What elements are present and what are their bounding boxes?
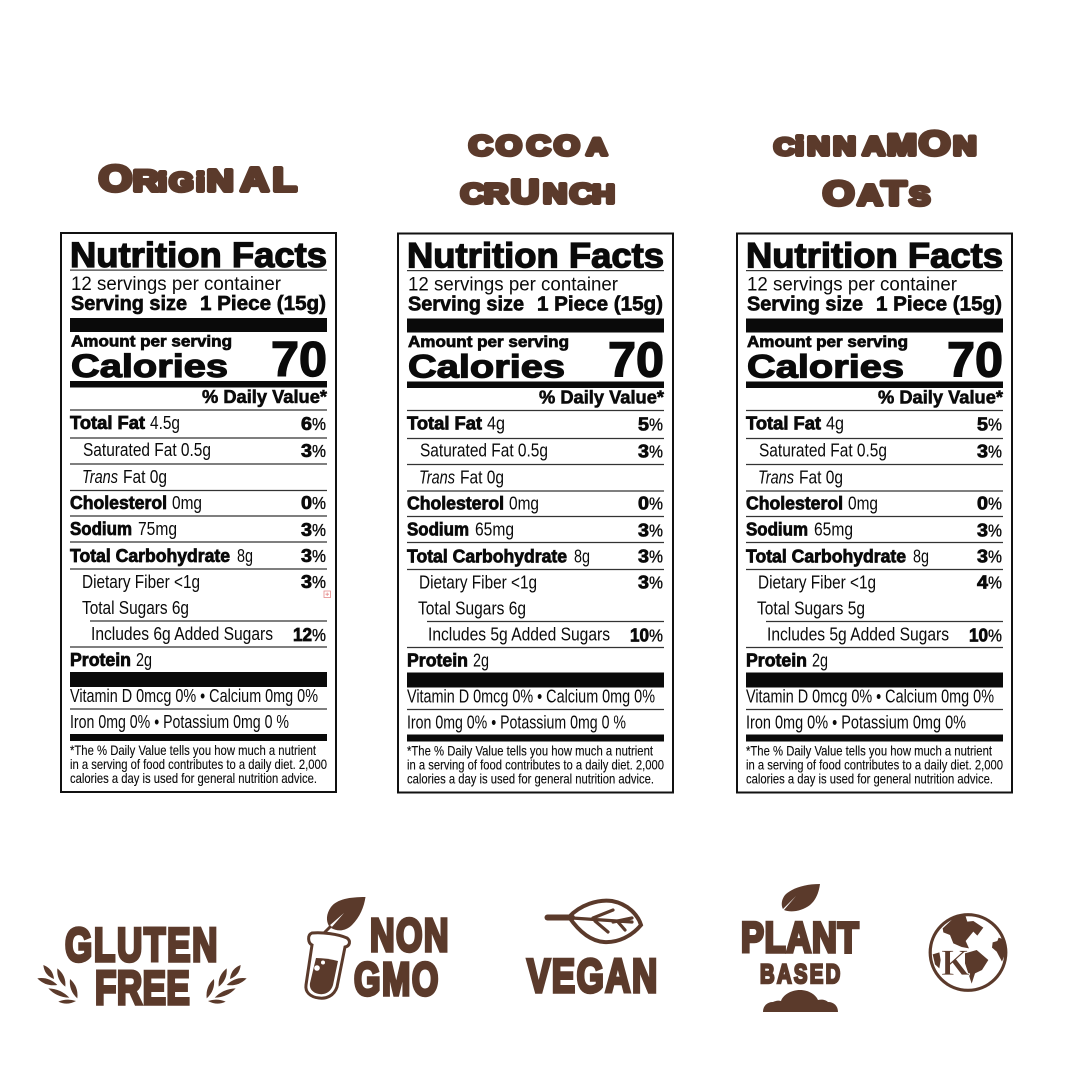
row: total carbohydrate bbox=[407, 546, 663, 566]
vitamins: Iron 0mg 0% • Potassium 0mg 0 % bbox=[407, 712, 626, 732]
row: cholesterol: % bbox=[312, 493, 326, 513]
row: protein: 2g bbox=[812, 650, 828, 670]
servings: Serving size bbox=[71, 293, 187, 315]
heading: Cocoa Crunch: C bbox=[570, 178, 594, 209]
heading: Original: O bbox=[99, 159, 132, 199]
thick bar bbox=[746, 672, 1003, 688]
row: total sugars: Total Sugars 5g bbox=[757, 598, 865, 618]
vitamins: Vitamin D 0mcg 0% • Calcium 0mg 0% bbox=[70, 685, 318, 706]
badge: gluten free bbox=[37, 918, 247, 1014]
badge: vegan: VEGAN bbox=[527, 949, 657, 1002]
calories: 70 bbox=[947, 334, 1003, 388]
heading: Cinnamon Oats bbox=[774, 124, 977, 212]
badge: plant based: BASED bbox=[760, 959, 840, 990]
row: dietary fiber: 3 bbox=[301, 572, 312, 592]
row: total fat: Total Fat bbox=[407, 414, 482, 434]
icon: globe with K: K bbox=[941, 943, 970, 984]
heading: Cocoa Crunch bbox=[461, 131, 615, 210]
row: sodium: 3 bbox=[638, 520, 649, 540]
medium bar bbox=[407, 382, 664, 388]
heading: Cinnamon Oats: i bbox=[795, 132, 804, 161]
servings bbox=[408, 274, 663, 316]
row: cholesterol: 0 bbox=[301, 493, 312, 513]
row: total carbohydrate bbox=[70, 545, 326, 566]
heading: Cocoa Crunch: C bbox=[527, 131, 551, 161]
calories: Calories bbox=[747, 348, 904, 384]
heading: Original bbox=[99, 159, 297, 199]
row: protein: Protein bbox=[407, 650, 468, 670]
badge: plant based bbox=[741, 884, 859, 1012]
heading: Original: R bbox=[133, 165, 159, 198]
row: total carbohydrate: 3 bbox=[977, 546, 988, 566]
thick bar bbox=[746, 318, 1003, 332]
thick bar bbox=[70, 672, 327, 687]
heading: Cinnamon Oats: N bbox=[807, 132, 830, 161]
row: saturated fat bbox=[83, 439, 326, 461]
row: cholesterol: 0mg bbox=[172, 492, 202, 513]
row: total sugars: Total Sugars 6g bbox=[418, 598, 526, 618]
calories bbox=[747, 334, 1003, 388]
calories: Amount per serving bbox=[747, 334, 908, 351]
row: trans fat bbox=[419, 466, 504, 488]
medium bar bbox=[746, 734, 1003, 742]
icon: test tube with leaf bbox=[306, 897, 366, 998]
row: added sugars: 10 bbox=[969, 626, 988, 646]
row: dietary fiber: Dietary Fiber <1g bbox=[758, 572, 876, 592]
calories bbox=[71, 333, 327, 387]
icon: leaf outline bbox=[548, 901, 641, 942]
badge: gluten free: GLUTEN bbox=[65, 918, 217, 971]
row: trans fat: Trans bbox=[82, 466, 118, 487]
calories: Calories bbox=[408, 348, 565, 384]
heading: Cocoa Crunch: C bbox=[461, 178, 485, 209]
row: cholesterol: % bbox=[988, 494, 1002, 514]
badge: vegan bbox=[527, 901, 657, 1002]
heading: Original: N bbox=[207, 164, 234, 198]
footnote: in a serving of food contributes to a daily diet. 2,000 bbox=[407, 756, 664, 772]
daily value header: % Daily Value* bbox=[878, 388, 1003, 408]
vitamins: Vitamin D 0mcg 0% • Calcium 0mg 0% bbox=[407, 686, 655, 706]
row: sodium: % bbox=[649, 520, 663, 540]
row: total carbohydrate: % bbox=[988, 546, 1002, 566]
row: dietary fiber: Dietary Fiber <1g bbox=[82, 571, 200, 592]
heading: Cocoa Crunch: U bbox=[511, 173, 539, 210]
heading: Cocoa Crunch: H bbox=[592, 180, 615, 209]
row: cholesterol: 0mg bbox=[509, 492, 539, 514]
panel: Cocoa Crunch nutrition facts bbox=[398, 234, 673, 792]
vitamins bbox=[70, 685, 318, 732]
servings: 1 Piece (15g) bbox=[537, 294, 663, 316]
row: total fat bbox=[407, 412, 663, 434]
row: dietary fiber bbox=[82, 571, 326, 592]
row: saturated fat bbox=[759, 440, 1002, 462]
row: protein: 2g bbox=[473, 650, 489, 670]
heading: Cinnamon Oats: A bbox=[862, 132, 885, 161]
heading: Cinnamon Oats: N bbox=[833, 132, 856, 161]
row: total fat: Total Fat bbox=[70, 413, 145, 433]
heading: Cocoa Crunch: C bbox=[469, 131, 493, 161]
heading: Cocoa Crunch: O bbox=[496, 131, 522, 161]
row: added sugars: % bbox=[649, 626, 663, 646]
row: protein: 2g bbox=[136, 649, 152, 670]
footnote bbox=[407, 742, 664, 786]
row: total carbohydrate bbox=[746, 546, 1002, 566]
row: sodium: 3 bbox=[977, 520, 988, 540]
row: cholesterol bbox=[746, 492, 1002, 514]
badge: non gmo: NON bbox=[370, 909, 448, 961]
servings: 12 servings per container bbox=[747, 274, 958, 296]
row: added sugars: Includes 6g Added Sugars bbox=[91, 623, 273, 644]
calories: 70 bbox=[271, 333, 327, 387]
panel: Cinnamon Oats nutrition facts bbox=[737, 234, 1012, 792]
row: total fat: 4g bbox=[487, 412, 505, 434]
icon: soil mound bbox=[763, 990, 838, 1012]
row: trans fat bbox=[758, 466, 843, 488]
row: sodium: % bbox=[312, 520, 326, 540]
row: total fat: % bbox=[312, 414, 326, 434]
row: dietary fiber: Dietary Fiber <1g bbox=[419, 572, 537, 592]
row: saturated fat: 3 bbox=[638, 442, 649, 462]
row: total carbohydrate: Total Carbohydrate bbox=[70, 546, 230, 566]
row: added sugars: Includes 5g Added Sugars bbox=[428, 624, 610, 644]
panel: Original nutrition facts bbox=[61, 233, 336, 792]
row: trans fat bbox=[82, 466, 167, 487]
footnote bbox=[746, 742, 1003, 786]
calories: Amount per serving bbox=[408, 334, 569, 351]
row: cholesterol: 0 bbox=[977, 494, 988, 514]
badge: non gmo: GMO bbox=[354, 953, 438, 1005]
row: trans fat: Fat 0g bbox=[799, 466, 843, 488]
icon: leaf bbox=[782, 884, 820, 911]
row: dietary fiber bbox=[419, 572, 663, 592]
row: saturated fat: % bbox=[312, 441, 326, 461]
row: sodium: 65mg bbox=[814, 518, 853, 540]
servings: 1 Piece (15g) bbox=[876, 294, 1002, 316]
row: sodium: 65mg bbox=[475, 518, 514, 540]
heading: Original: A bbox=[240, 161, 269, 198]
footnote: *The % Daily Value tells you how much a nutrient bbox=[407, 742, 653, 758]
vitamins bbox=[746, 686, 994, 732]
heading: Original: G bbox=[169, 168, 193, 197]
row: saturated fat: Saturated Fat 0.5g bbox=[83, 439, 211, 460]
row: trans fat: Trans bbox=[419, 466, 455, 488]
row: protein: Protein bbox=[70, 650, 131, 670]
heading: Cocoa Crunch: O bbox=[554, 131, 580, 161]
row: trans fat: Trans bbox=[758, 466, 794, 488]
heading: Cinnamon Oats: T bbox=[882, 174, 907, 212]
row: sodium bbox=[70, 518, 326, 540]
row: total fat: % bbox=[988, 414, 1002, 434]
medium bar bbox=[70, 734, 327, 741]
heading: Original: i bbox=[158, 168, 167, 197]
row: saturated fat: Saturated Fat 0.5g bbox=[420, 440, 548, 460]
row: dietary fiber: 4 bbox=[977, 572, 988, 592]
row: trans fat: Fat 0g bbox=[460, 466, 504, 488]
title: Nutrition Facts: Nutrition Facts bbox=[407, 236, 664, 276]
row: total carbohydrate: 3 bbox=[301, 546, 312, 566]
row: total fat: 5 bbox=[638, 414, 649, 434]
row: total sugars: Total Sugars 6g bbox=[82, 597, 189, 618]
row: saturated fat: % bbox=[988, 442, 1002, 462]
row: saturated fat: 3 bbox=[977, 442, 988, 462]
row: saturated fat: Saturated Fat 0.5g bbox=[759, 440, 887, 460]
heading: Cinnamon Oats: O bbox=[919, 124, 950, 162]
heading: Original: L bbox=[273, 161, 297, 198]
row: total fat: 6 bbox=[301, 414, 312, 434]
vitamins: Vitamin D 0mcg 0% • Calcium 0mg 0% bbox=[746, 686, 994, 706]
row: total fat bbox=[746, 412, 1002, 434]
icon: left wheat bbox=[37, 965, 78, 1004]
row: cholesterol: 0 bbox=[638, 494, 649, 514]
row: protein: Protein bbox=[746, 650, 807, 670]
row: sodium: Sodium bbox=[407, 520, 469, 540]
row: saturated fat bbox=[420, 440, 663, 462]
badge: non gmo bbox=[306, 897, 448, 1005]
footnote: in a serving of food contributes to a daily diet. 2,000 bbox=[746, 756, 1003, 772]
row: cholesterol: Cholesterol bbox=[746, 494, 843, 514]
calories bbox=[408, 334, 664, 388]
icon: globe with K bbox=[930, 914, 1006, 990]
row: total fat: 5 bbox=[977, 414, 988, 434]
row: total fat bbox=[70, 412, 326, 434]
row: total carbohydrate: Total Carbohydrate bbox=[746, 546, 906, 566]
row: total carbohydrate: % bbox=[312, 546, 326, 566]
medium bar bbox=[746, 382, 1003, 388]
row: total fat: Total Fat bbox=[746, 414, 821, 434]
row: added sugars: Includes 5g Added Sugars bbox=[767, 624, 949, 644]
daily value header: % Daily Value* bbox=[202, 387, 327, 407]
servings: Serving size bbox=[747, 294, 863, 316]
row: saturated fat: % bbox=[649, 442, 663, 462]
row: cholesterol: Cholesterol bbox=[70, 493, 167, 513]
footnote: *The % Daily Value tells you how much a nutrient bbox=[746, 742, 992, 758]
heading: Cinnamon Oats: C bbox=[774, 133, 795, 160]
row: dietary fiber: 3 bbox=[638, 572, 649, 592]
badge: plant based: PLANT bbox=[741, 915, 859, 962]
vitamins bbox=[407, 686, 655, 732]
badge: gluten free: FREE bbox=[95, 961, 190, 1014]
row: total fat: % bbox=[649, 414, 663, 434]
daily value header: % Daily Value* bbox=[539, 388, 664, 408]
heading: Original: i bbox=[196, 168, 205, 197]
servings bbox=[71, 274, 326, 315]
footnote: in a serving of food contributes to a daily diet. 2,000 bbox=[70, 756, 327, 772]
row: total fat: 4g bbox=[826, 412, 844, 434]
footnote: *The % Daily Value tells you how much a nutrient bbox=[70, 742, 316, 758]
footnote: calories a day is used for general nutrition advice. bbox=[407, 770, 654, 786]
thick bar bbox=[407, 672, 664, 688]
footnote bbox=[70, 742, 327, 786]
row: sodium: Sodium bbox=[746, 520, 808, 540]
row: dietary fiber: % bbox=[649, 572, 663, 592]
row: added sugars: % bbox=[988, 626, 1002, 646]
heading: Cinnamon Oats: A bbox=[857, 179, 883, 211]
heading: Cinnamon Oats: N bbox=[953, 131, 977, 161]
row: total carbohydrate: % bbox=[649, 546, 663, 566]
row: total carbohydrate: 3 bbox=[638, 546, 649, 566]
row: cholesterol bbox=[70, 492, 326, 513]
medium bar bbox=[407, 734, 664, 742]
title: Nutrition Facts: Nutrition Facts bbox=[746, 236, 1003, 276]
row: dietary fiber bbox=[758, 572, 1002, 592]
row: cholesterol bbox=[407, 492, 663, 514]
marker: small red plus bbox=[324, 591, 330, 598]
thick bar bbox=[70, 318, 327, 332]
row: total carbohydrate: Total Carbohydrate bbox=[407, 546, 567, 566]
heading: Cocoa Crunch: A bbox=[586, 133, 607, 160]
row: total carbohydrate: 8g bbox=[574, 546, 590, 566]
footnote: calories a day is used for general nutrition advice. bbox=[746, 770, 993, 786]
heading: Cocoa Crunch: N bbox=[543, 178, 567, 209]
row: cholesterol: % bbox=[649, 494, 663, 514]
calories: Calories bbox=[71, 348, 228, 384]
title: Nutrition Facts: Nutrition Facts bbox=[70, 236, 327, 275]
row: sodium bbox=[407, 518, 663, 540]
row: sodium: 3 bbox=[301, 520, 312, 540]
footnote: calories a day is used for general nutrition advice. bbox=[70, 770, 317, 786]
servings: 12 servings per container bbox=[408, 274, 619, 296]
icon: right wheat bbox=[206, 965, 247, 1004]
row: sodium: % bbox=[988, 520, 1002, 540]
heading: Cinnamon Oats: O bbox=[823, 174, 854, 212]
row: total carbohydrate: 8g bbox=[913, 546, 929, 566]
row: trans fat: Fat 0g bbox=[123, 466, 167, 487]
row: dietary fiber: % bbox=[312, 572, 326, 592]
row: added sugars: % bbox=[312, 625, 326, 645]
row: cholesterol: 0mg bbox=[848, 492, 878, 514]
calories: 70 bbox=[608, 334, 664, 388]
heading: Cinnamon Oats: M bbox=[887, 129, 917, 162]
vitamins: Iron 0mg 0% • Potassium 0mg 0 % bbox=[70, 711, 289, 732]
servings: 12 servings per container bbox=[71, 274, 282, 295]
row: sodium bbox=[746, 518, 1002, 540]
heading: Cinnamon Oats: S bbox=[909, 182, 930, 211]
row: added sugars: 12 bbox=[293, 625, 312, 645]
row: saturated fat: 3 bbox=[301, 441, 312, 461]
heading: Cocoa Crunch: R bbox=[484, 178, 508, 209]
calories: Amount per serving bbox=[71, 334, 232, 350]
vitamins: Iron 0mg 0% • Potassium 0mg 0% bbox=[746, 712, 966, 732]
row: total carbohydrate: 8g bbox=[237, 545, 253, 566]
row: added sugars: 10 bbox=[630, 626, 649, 646]
row: sodium: 75mg bbox=[138, 518, 177, 539]
medium bar bbox=[70, 381, 327, 388]
row: total fat: 4.5g bbox=[150, 412, 180, 433]
row: cholesterol: Cholesterol bbox=[407, 494, 504, 514]
servings bbox=[747, 274, 1002, 316]
row: sodium: Sodium bbox=[70, 519, 132, 539]
servings: 1 Piece (15g) bbox=[200, 293, 326, 315]
row: dietary fiber: % bbox=[988, 572, 1002, 592]
thick bar bbox=[407, 318, 664, 332]
servings: Serving size bbox=[408, 294, 524, 316]
